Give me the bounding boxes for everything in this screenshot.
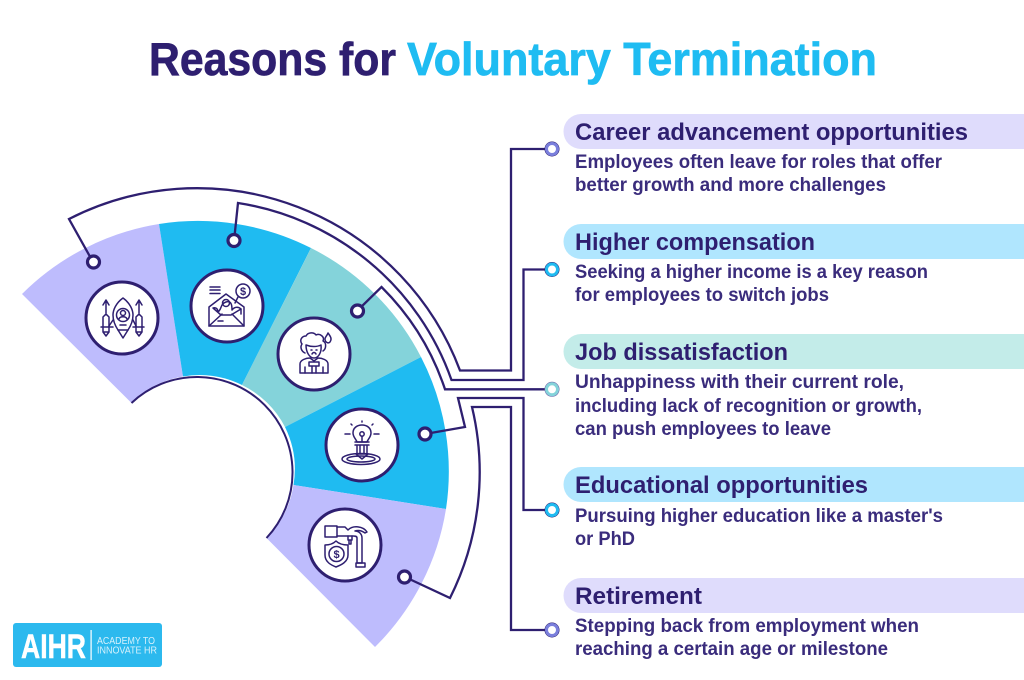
pill: [564, 224, 1024, 259]
icon: rocket: [86, 282, 158, 354]
logo: AIHR: ACADEMY TO: [97, 636, 155, 647]
icon: envelope with money: [191, 270, 263, 342]
icon: retirement savings faucet: $: [333, 549, 340, 561]
body: Employees often leave for roles that offer: [575, 152, 943, 173]
item: higher compensation: [564, 224, 1024, 306]
title: [149, 33, 877, 85]
item: higher compensation: for employees to switch jobs: [575, 285, 829, 306]
segment: job dissatisfaction: [242, 248, 421, 427]
connector: job dissatisfaction: [357, 287, 545, 389]
segment: higher compensation: [159, 221, 311, 385]
logo: AIHR: AIHR: [21, 628, 86, 666]
icon: unhappy employee: [278, 318, 350, 390]
body: Pursuing higher education like a master's: [575, 506, 943, 527]
item: job dissatisfaction: can push employees to leave: [575, 419, 831, 440]
pill: [564, 467, 1024, 502]
title: Reasons for: [149, 33, 396, 85]
segment: career advancement: [22, 224, 183, 403]
connector: higher compensation: [234, 203, 545, 380]
segment: retirement: [266, 485, 446, 647]
heading: Educational opportunities: [575, 472, 868, 499]
node dots on segments: [88, 234, 431, 583]
body: Unhappiness with their current role,: [575, 372, 904, 393]
item: career advancement opportunities: better growth and more challenges: [575, 175, 886, 196]
body: Seeking a higher income is a key reason: [575, 262, 928, 283]
heading: Job dissatisfaction: [575, 339, 788, 366]
title: Voluntary Termination: [407, 33, 877, 85]
body: Stepping back from employment when: [575, 616, 919, 637]
item: job dissatisfaction: [564, 334, 1024, 440]
item: retirement: [564, 578, 1024, 660]
item: job dissatisfaction: including lack of recognition or growth,: [575, 396, 922, 417]
icon: envelope with money: $: [240, 286, 246, 298]
item: career advancement opportunities: [564, 114, 1024, 196]
item: educational opportunities: or PhD: [575, 529, 635, 550]
icon: light bulb idea: [326, 409, 398, 481]
heading: Career advancement opportunities: [575, 119, 968, 146]
logo: AIHR: INNOVATE HR: [97, 646, 157, 656]
inner arc outline: [132, 377, 293, 538]
segment: educational opportunities: [285, 357, 449, 509]
heading: Higher compensation: [575, 229, 815, 256]
icon: retirement savings faucet: [309, 509, 381, 581]
connector: retirement: [405, 407, 545, 630]
item: educational opportunities: [564, 467, 1024, 550]
pill: [564, 114, 1024, 149]
pill: [564, 578, 1024, 613]
connector: career advancement: [69, 149, 545, 370]
item: retirement: reaching a certain age or milestone: [575, 639, 888, 660]
heading: Retirement: [575, 583, 702, 610]
connector: educational opportunities: [425, 398, 545, 510]
logo: AIHR: [13, 623, 162, 667]
connector end dots: [544, 142, 560, 638]
semicircle diagram: [22, 221, 449, 647]
pill: [564, 334, 1024, 369]
